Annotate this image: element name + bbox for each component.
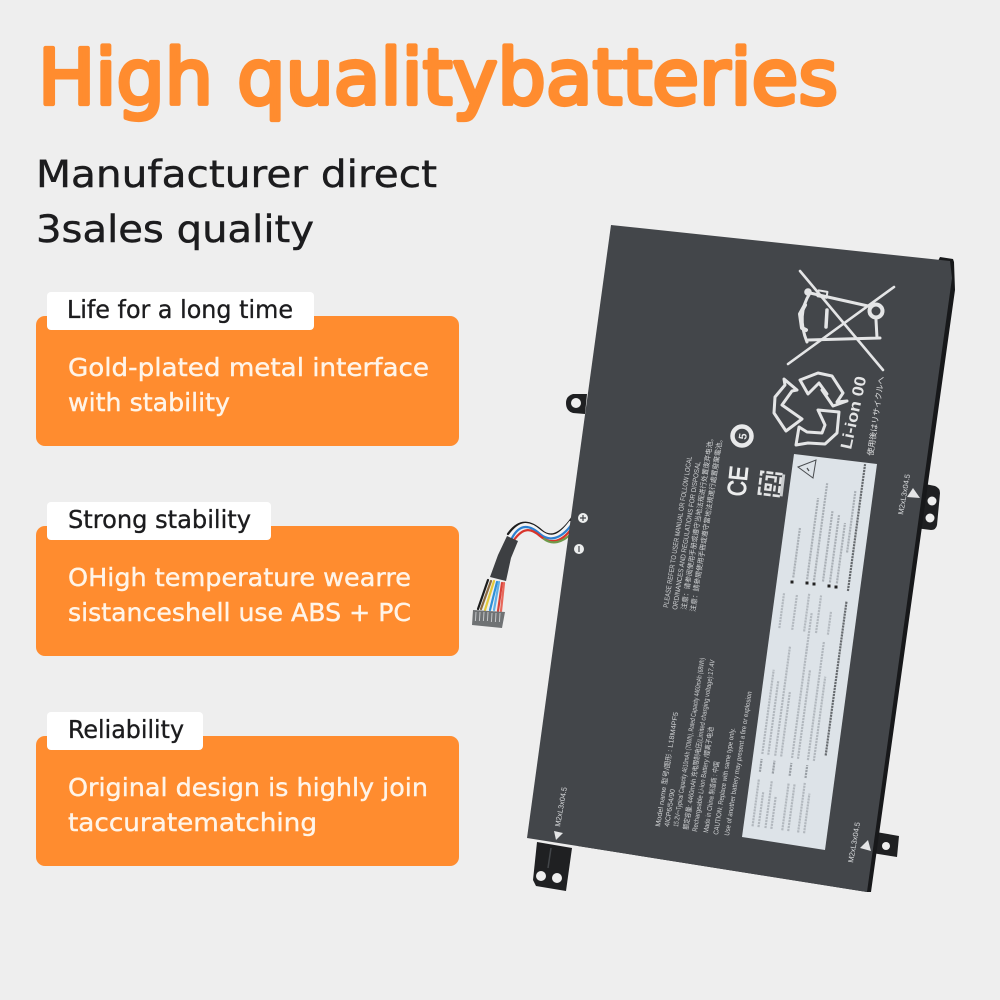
specification text: CAUTION: Replace with same type only. — [713, 728, 737, 835]
label bullets — [790, 580, 838, 588]
screw marks: M2xL3x04.5 — [846, 821, 862, 863]
panel: strong stability: Strong stability — [68, 505, 251, 534]
battery face — [527, 225, 952, 892]
disposal notice: 注意：请参阅使用手册或遵守当地法规进行处置废弃电池。 — [679, 434, 716, 610]
CE mark: CE — [721, 465, 754, 498]
tab: right — [915, 483, 940, 530]
screws — [574, 513, 588, 554]
specification text: 额定容量: 4460mAh 充电限制电压(Limited charging voltage):17.4V — [681, 659, 717, 830]
disposal notice: ORDINANCES AND REGULATIONS FOR DISPOSAL — [672, 461, 702, 610]
illegible microprint rendered as texture — [753, 456, 865, 835]
panel: life for a long time — [36, 292, 459, 446]
icon: recycling arrows — [774, 373, 847, 445]
panel: strong stability: OHigh temperature wearre — [68, 563, 411, 592]
icon: circular mark — [732, 426, 752, 446]
subtitle: 3sales quality — [36, 208, 314, 251]
icon: warning triangle — [798, 460, 816, 478]
subtitle: Manufacturer direct — [36, 153, 437, 196]
panel: strong stability — [36, 502, 459, 656]
disposal notice: 注意：請參閱使用手冊或遵守當地法規進行處置廢棄電池。 — [688, 435, 725, 612]
tab: bottom right — [872, 832, 899, 857]
panel: reliability — [36, 712, 459, 866]
specification text: Made in China 制造商 : 中国 — [701, 761, 721, 833]
battery — [472, 225, 955, 892]
tab holes — [536, 398, 936, 883]
specification text: 4ICP6/54/90 — [664, 789, 677, 827]
title: High qualitybatteries — [38, 34, 838, 123]
recycling note in Japanese: 使用後はリサイクルへ — [865, 376, 886, 456]
panel: life for a long time: with stability — [68, 388, 230, 417]
disposal notice — [663, 434, 725, 612]
battery edge — [578, 257, 955, 892]
screw marks: M2xL3x04.5 — [896, 473, 912, 515]
Li-ion mark: Li-ion 00 — [838, 375, 870, 451]
subtitle — [36, 153, 437, 251]
icon: circular mark: 5 — [737, 433, 750, 440]
tab: bottom left — [533, 842, 572, 891]
specification text: 15.2V⎓Typical Capacity 4610mAh (70Wh), Rated Capacity 4460mAh (68Wh) — [673, 657, 707, 827]
tab slit — [548, 848, 551, 868]
panel: strong stability: sistanceshell use ABS + PC — [68, 598, 411, 627]
specification text: Model name 型号/图形 : L18M4PF5 — [653, 711, 680, 827]
warning label — [742, 454, 877, 850]
panel: life for a long time: Gold-plated metal interface — [68, 353, 429, 382]
cable sleeve — [490, 536, 518, 581]
icon: crossed-out bin — [788, 271, 894, 370]
disposal notice: PLEASE REFER TO USER MANUAL OR FOLLOW LOCAL — [663, 456, 694, 608]
specification text: Use of another battery may present a fire or explosion — [724, 691, 754, 836]
connector — [472, 610, 505, 628]
panel: life for a long time: Life for a long time — [67, 295, 293, 324]
panel: reliability: taccuratematching — [68, 808, 317, 837]
mounting tabs — [533, 394, 940, 891]
panel: reliability: Original design is highly join — [68, 773, 428, 802]
panel: reliability: Reliability — [68, 715, 184, 744]
screw marks: M2xL3x04.5 — [553, 786, 569, 827]
tab: left — [566, 394, 587, 414]
cable and connector — [472, 518, 572, 628]
specification text: Rechargeable Li-ion Battery /锂离子电池 — [690, 726, 716, 832]
screw marks — [553, 473, 920, 863]
icon: compliance mark — [759, 472, 785, 497]
specification text — [653, 657, 754, 836]
